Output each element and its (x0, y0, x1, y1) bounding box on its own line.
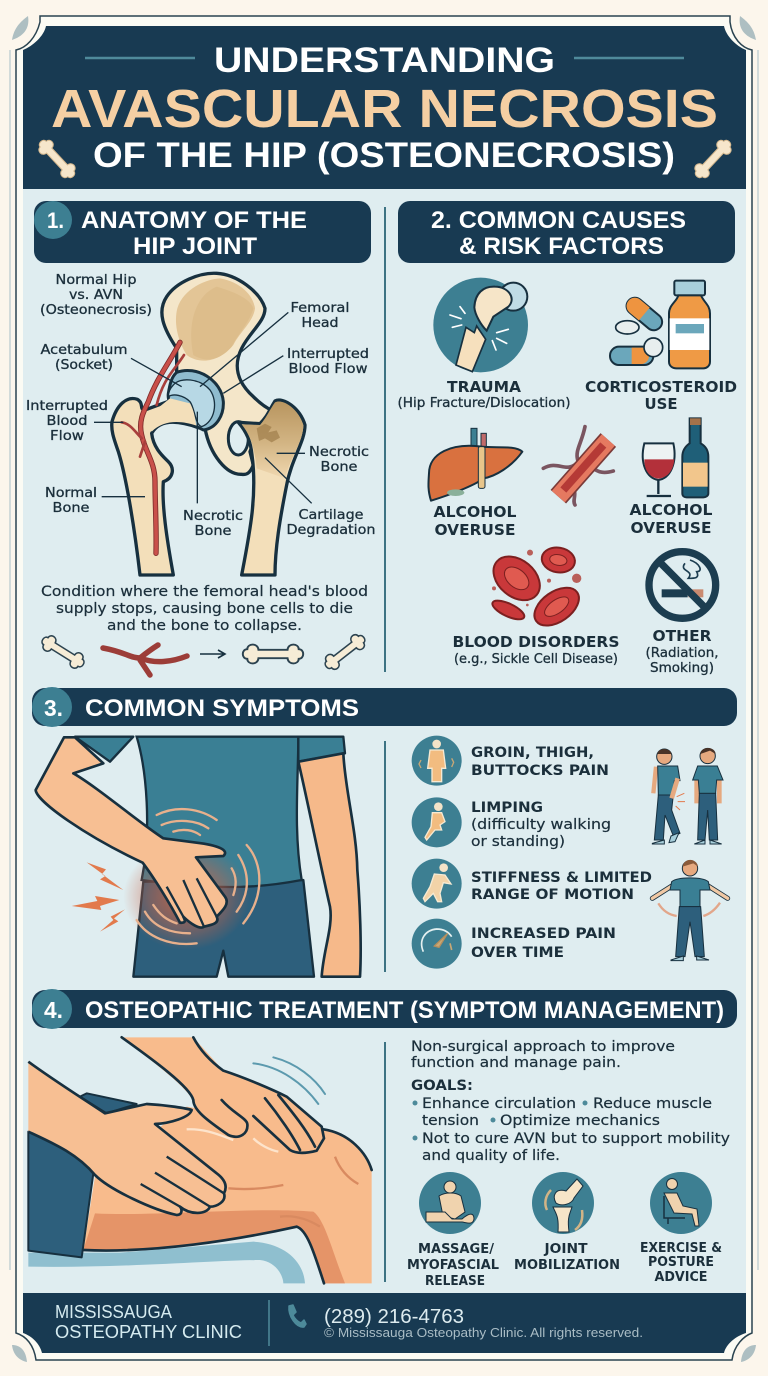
icon: wine and bottle (643, 418, 708, 497)
shorts (28, 1093, 137, 1257)
anatomy labels: Normal (45, 486, 97, 501)
femoral head and socket (168, 370, 223, 430)
icon: joint mobilization (532, 1172, 594, 1234)
footer (23, 1293, 746, 1353)
footer: OSTEOPATHY CLINIC (55, 1322, 242, 1342)
anatomy labels: Femoral (290, 301, 350, 316)
cause labels: OTHER (652, 627, 712, 645)
symptom labels: RANGE OF MOTION (471, 887, 634, 903)
anatomy labels: Bone (320, 460, 358, 475)
section 1 heading: HIP JOINT (133, 233, 257, 260)
anatomy labels: Flow (50, 429, 84, 444)
obturator foramen (228, 422, 248, 455)
symptom labels: OVER TIME (471, 945, 564, 961)
right arm (298, 753, 361, 977)
leg (83, 1107, 372, 1283)
anatomy labels: Head (302, 316, 338, 331)
left femur (112, 398, 198, 575)
title line 1: UNDERSTANDING (214, 41, 555, 80)
section 3 heading: COMMON SYMPTOMS (85, 695, 359, 722)
icon: liver (428, 428, 522, 501)
icon: exercise and posture (650, 1172, 712, 1234)
icon: damaged blood vessel (543, 427, 613, 505)
motion lines (253, 1057, 325, 1104)
icon: body pain (412, 736, 462, 786)
chart: hip joint anatomy illustration (94, 273, 312, 575)
anatomy labels: Cartilage (298, 508, 364, 523)
anatomy labels (26, 273, 376, 539)
icon: limping (412, 797, 462, 847)
illustration: hands massaging thigh (28, 1037, 372, 1283)
anatomy description: Condition where the femoral head's blood (41, 584, 368, 600)
left arm and hand (36, 737, 227, 928)
symptom labels: LIMPING (471, 800, 543, 816)
clinic name: MISSISSAUGA (55, 1302, 172, 1322)
shorts (133, 880, 314, 977)
anatomy labels: Degradation (286, 523, 376, 538)
title line 3: OF THE HIP (OSTEONECROSIS) (93, 136, 675, 175)
title banner (23, 26, 746, 189)
cause labels (398, 378, 737, 676)
section 4 heading: 4. (44, 997, 63, 1023)
title line 2: AVASCULAR NECROSIS (51, 79, 718, 139)
treatment labels: MASSAGE/ (418, 1242, 494, 1257)
panel: causes icons (428, 278, 716, 633)
cause labels: BLOOD DISORDERS (452, 633, 620, 651)
treatment labels: POSTURE (648, 1255, 714, 1270)
treatment labels: MOBILIZATION (514, 1258, 620, 1273)
table sheet (28, 1242, 305, 1283)
section 2 heading (398, 201, 735, 263)
cause labels: (Radiation, (646, 646, 718, 661)
treatment labels (407, 1241, 722, 1289)
pain glow (123, 843, 250, 950)
icon: blood cells (485, 545, 586, 633)
femoral neck highlight (150, 398, 197, 432)
treatment description: Enhance circulation (422, 1096, 576, 1112)
cause labels: (Hip Fracture/Dislocation) (398, 396, 570, 411)
anatomy labels: Interrupted (26, 399, 108, 414)
anatomy labels: Interrupted (287, 347, 369, 362)
cause labels: USE (644, 395, 678, 413)
symptom labels: or standing) (471, 834, 565, 850)
cause labels: OVERUSE (630, 519, 712, 537)
anatomy labels: vs. AVN (69, 288, 123, 303)
symptom list icons (412, 736, 728, 969)
section 4 heading: OSTEOPATHIC TREATMENT (SYMPTOM MANAGEMENT) (85, 997, 724, 1024)
section 3 heading: 3. (44, 695, 63, 721)
iliac fossa (176, 278, 255, 361)
icon: range of motion figure (652, 860, 728, 961)
symptom labels: STIFFNESS & LIMITED (471, 870, 652, 886)
anatomy labels: Acetabulum (40, 343, 128, 358)
cause labels: CORTICOSTEROID (585, 378, 737, 396)
section 2 heading: & RISK FACTORS (459, 233, 664, 260)
anatomy labels: Bone (52, 501, 90, 516)
treatment labels: ADVICE (654, 1270, 708, 1285)
upper hand (122, 1037, 324, 1153)
treatment description: GOALS: (411, 1078, 473, 1094)
treatment description: and quality of life. (422, 1148, 560, 1164)
anatomy labels: (Socket) (55, 358, 113, 373)
lightning bolts (72, 862, 125, 932)
icon: bone right (691, 136, 735, 182)
lower hand (28, 1062, 226, 1215)
cause labels: (e.g., Sickle Cell Disease) (454, 652, 618, 667)
phone number: (289) 216-4763 (324, 1306, 464, 1328)
anatomy description (41, 584, 368, 634)
treatment description (411, 1039, 730, 1164)
anatomy labels: Normal Hip (56, 273, 136, 288)
cause labels: ALCOHOL (434, 503, 517, 521)
icon: massage (419, 1172, 481, 1234)
symptom labels: GROIN, THIGH, (471, 745, 594, 761)
icon: limping figure (652, 749, 685, 844)
treatment description: Not to cure AVN but to support mobility (422, 1131, 730, 1147)
symptom labels: (difficulty walking (471, 817, 611, 833)
icon: trauma (433, 278, 528, 372)
anatomy labels: (Osteonecrosis) (40, 303, 152, 318)
icon: bone left (35, 136, 79, 182)
anatomy description: supply stops, causing bone cells to die (56, 601, 353, 617)
icon: no smoking (649, 552, 716, 618)
shirt (137, 737, 302, 887)
anatomy labels: Necrotic (309, 445, 369, 460)
treatment labels: EXERCISE & (640, 1241, 722, 1256)
cause labels: TRAUMA (447, 378, 521, 396)
treatment description: Reduce muscle (593, 1096, 712, 1112)
section 3 heading (32, 687, 737, 727)
anatomy labels: Necrotic (183, 509, 243, 524)
treatment description: Non-surgical approach to improve (411, 1039, 675, 1055)
icon: pills and bottle (610, 281, 710, 368)
icon: gauge (412, 919, 462, 969)
pain arcs (137, 809, 259, 944)
treatment labels: RELEASE (425, 1274, 485, 1289)
treatment description: Optimize mechanics (500, 1113, 660, 1129)
symptom labels: INCREASED PAIN (471, 926, 616, 942)
section 2 heading: 2. COMMON CAUSES (431, 207, 686, 234)
section 1 heading: ANATOMY OF THE (81, 207, 307, 234)
treatment description: tension (422, 1113, 479, 1129)
cause labels: ALCOHOL (630, 501, 713, 519)
icon: phone (289, 1305, 306, 1327)
section 1 heading: 1. (47, 208, 64, 233)
anatomy labels: Blood Flow (288, 362, 368, 377)
copyright: © Mississauga Osteopathy Clinic. All rights reserved. (324, 1326, 643, 1340)
treatment labels: JOINT (543, 1242, 588, 1257)
icon: standing figure (693, 748, 723, 844)
section 4 heading (32, 989, 737, 1029)
pelvis (162, 273, 273, 474)
light panel background (23, 188, 746, 1294)
cause labels: Smoking) (650, 661, 714, 676)
symptom labels: BUTTOCKS PAIN (471, 763, 609, 779)
leader lines (94, 312, 312, 503)
cause labels: OVERUSE (434, 521, 516, 539)
anatomy labels: Bone (194, 524, 232, 539)
right femur (238, 400, 305, 575)
blood vessels (141, 342, 180, 553)
anatomy labels: Blood (46, 414, 88, 429)
section 1 heading (34, 201, 371, 263)
illustration: person holding painful hip (36, 737, 361, 977)
treatment labels: MYOFASCIAL (407, 1258, 499, 1273)
anatomy description: and the bone to collapse. (107, 618, 302, 634)
icon: bone to vessel to bone sequence (38, 631, 369, 675)
icon: stiffness (412, 859, 462, 909)
treatment description: function and manage pain. (411, 1055, 621, 1071)
symptom labels (471, 745, 652, 961)
